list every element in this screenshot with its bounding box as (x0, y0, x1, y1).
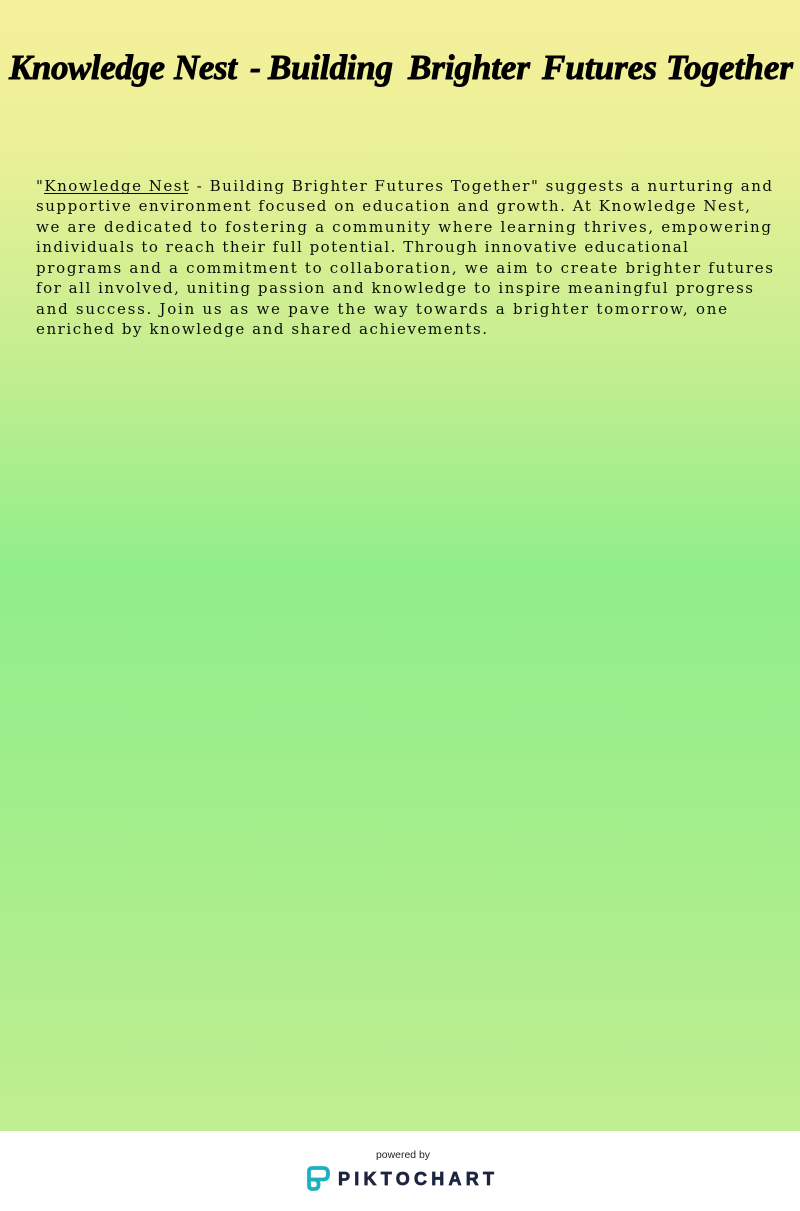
icon: Piktochart logo (309, 1168, 328, 1189)
title: Knowledge (8, 48, 165, 87)
body paragraph: programs and a commitment to collaboration, we aim to create brighter futures (36, 259, 773, 277)
body paragraph: individuals to reach their full potential. Through innovative educational (36, 238, 688, 256)
body paragraph (36, 177, 773, 338)
title: - (250, 48, 261, 87)
powered by label: powered by (376, 1149, 431, 1161)
body paragraph: for all involved, uniting passion and knowledge to inspire meaningful progress (36, 279, 753, 297)
title: Building (267, 48, 393, 87)
body paragraph: enriched by knowledge and shared achievements. (36, 320, 487, 338)
title (8, 48, 793, 87)
title: Nest (173, 48, 238, 87)
title: Futures (541, 48, 657, 87)
body paragraph: "Knowledge Nest - Building Brighter Futures Together" suggests a nurturing and (36, 177, 772, 195)
body paragraph: supportive environment focused on education and growth. At Knowledge Nest, (36, 197, 750, 215)
body paragraph: and success. Join us as we pave the way towards a brighter tomorrow, one (36, 300, 727, 318)
body paragraph: we are dedicated to fostering a community where learning thrives, empowering (36, 218, 771, 236)
footer: powered by Piktochart (0, 1131, 800, 1211)
logo wordmark: PIKTOCHART (338, 1169, 494, 1189)
title: Brighter (407, 48, 530, 87)
title: Together (666, 48, 793, 87)
